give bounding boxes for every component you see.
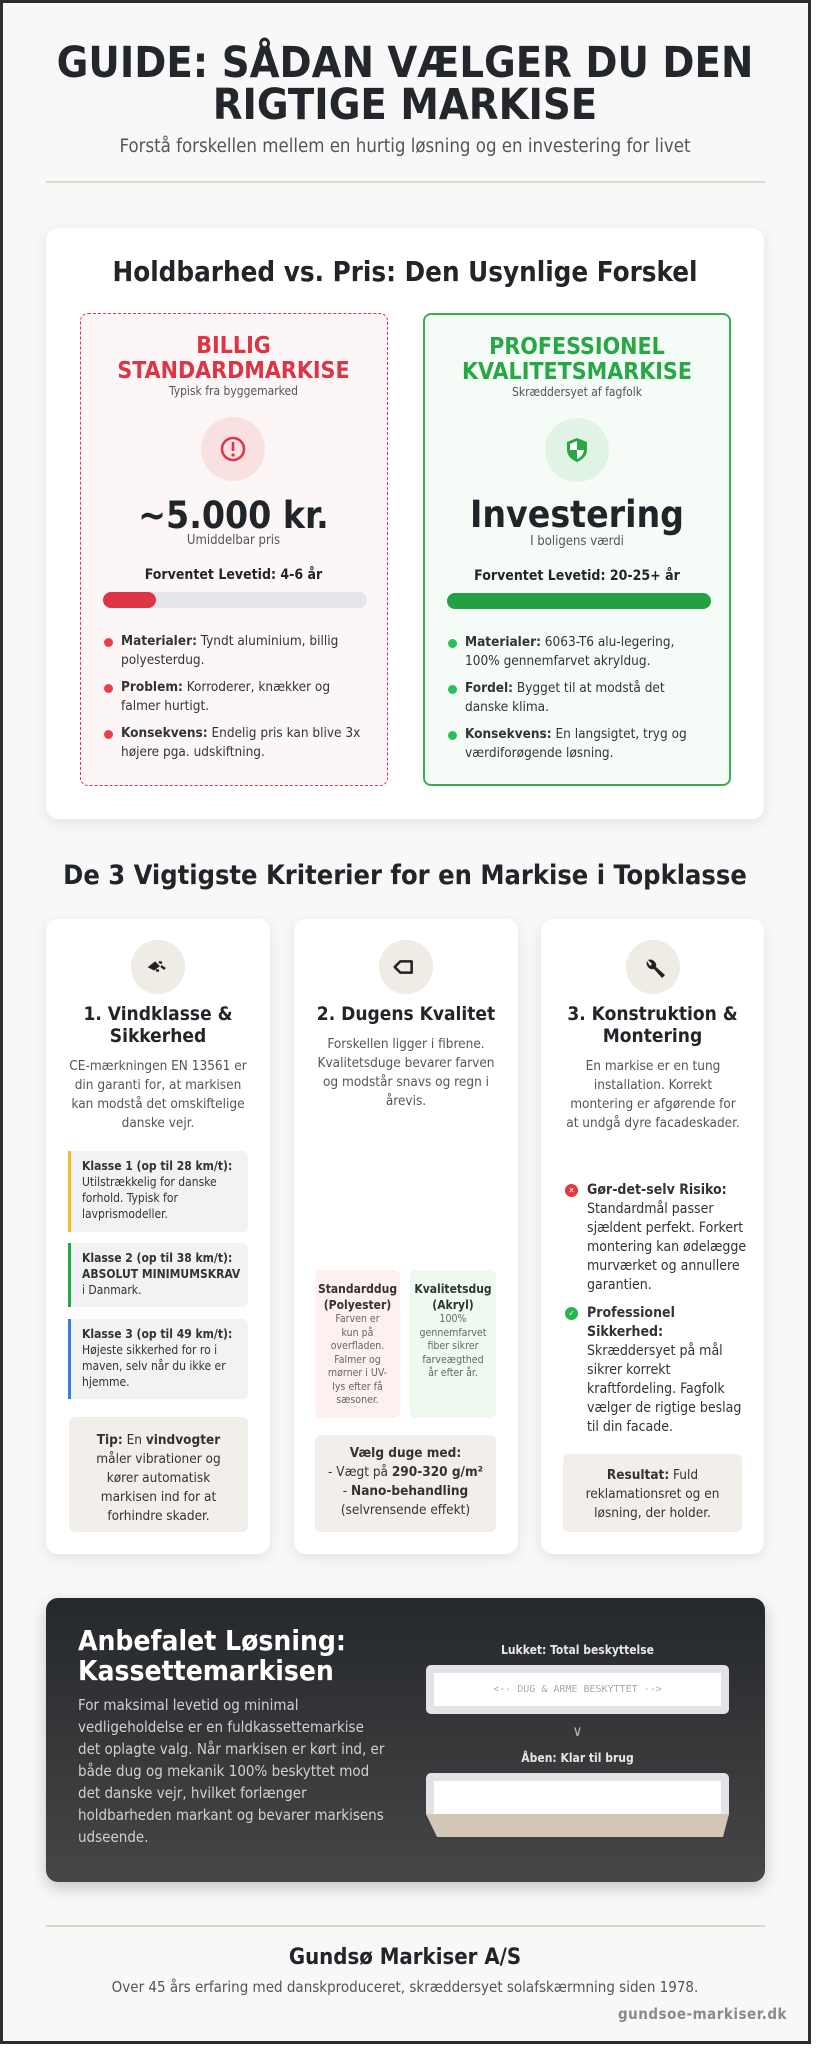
panel: criterion 3: En markise er en tung: [586, 1058, 720, 1074]
panel: durability vs price: [46, 228, 764, 819]
klasse 1: forhold. Typisk for: [82, 1191, 178, 1205]
panel: criterion 2: [294, 919, 518, 1554]
bar: lifetime: [447, 593, 711, 609]
panel: criterion 3: Montering: [603, 1025, 702, 1047]
choose box: (selvrensende effekt): [341, 1502, 470, 1518]
subtitle: Forstå forskellen mellem en hurtig løsning og en investering for livet: [120, 136, 690, 157]
panel: professional awning: KVALITETSMARKISE: [462, 359, 692, 385]
choose box: - Vægt på 290-320 g/m²: [328, 1464, 483, 1480]
klasse 2: ABSOLUT MINIMUMSKRAV: [82, 1267, 240, 1281]
tip box: Tip: En vindvogter måler vibrationer og kører automatisk markisen ind for at forhindre skader.: [96, 1432, 221, 1524]
klasse 1: lavprismodeller.: [82, 1207, 168, 1221]
panel: professional awning: PROFESSIONEL: [489, 334, 665, 360]
icon: shield: [545, 418, 609, 482]
panel: criterion 1: Sikkerhed: [110, 1025, 206, 1047]
fabric: standard: Standarddug (Polyester): [318, 1282, 397, 1312]
choose box: [315, 1435, 496, 1532]
panel: criterion 3: [541, 919, 764, 1554]
panel: cheap awning: Forventet Levetid: 4-6 år: [145, 567, 322, 583]
fabric: quality: gennemfarvet: [420, 1326, 486, 1338]
choose box: - Nano-behandling: [343, 1483, 468, 1499]
arrow: ∨: [573, 1722, 582, 1740]
klasse 3: Højeste sikkerhed for ro i: [82, 1343, 217, 1357]
klasse 2: i Danmark.: [82, 1283, 141, 1297]
choose box: Vælg duge med:: [350, 1445, 461, 1461]
heading: criteria: De 3 Vigtigste Kriterier for en Markise i Topklasse: [63, 860, 747, 891]
diagram: open cassette: Åben: Klar til brug: [521, 1751, 634, 1765]
panel: cheap awning: ~5.000 kr.: [138, 494, 329, 537]
panel: criterion 2: Forskellen ligger i fibrene. Kvalitetsduge bevarer farven og modstår snavs og regn i årevis.: [317, 1036, 494, 1109]
panel: criterion 1: CE-mærkningen EN 13561 er din garanti for, at markisen kan modstå det omskiftelige danske vejr.: [69, 1058, 247, 1131]
klasse 3: hjemme.: [82, 1375, 130, 1389]
heading: Holdbarhed vs. Pris: Den Usynlige Forskel: [112, 256, 697, 288]
panel: cheap awning: Konsekvens: Endelig pris kan blive 3x højere pga. udskiftning.: [121, 725, 360, 760]
fabric: quality: Kvalitetsdug (Akryl): [414, 1282, 492, 1312]
panel: professional awning: Investering: [470, 493, 684, 536]
panel: professional awning: Fordel: Bygget til at modstå det danske klima.: [465, 680, 665, 715]
fabric: standard: Farven er: [335, 1313, 380, 1325]
panel: criterion 3: installation. Korrekt: [594, 1077, 712, 1093]
panel: cheap awning: BILLIG: [196, 333, 271, 359]
panel: professional awning: Skræddersyet af fagfolk: [512, 385, 642, 399]
fabric: quality: 100%: [439, 1313, 466, 1325]
klasse 1: [68, 1151, 248, 1232]
footer: url: gundsoe-markiser.dk: [618, 2005, 787, 2023]
panel: criterion 3: 3. Konstruktion &: [567, 1003, 738, 1025]
panel: criterion 1: 1. Vindklasse &: [83, 1003, 233, 1025]
panel: recommended solution: <-- DUG & ARME BESKYTTET -->: [493, 1684, 662, 1695]
panel: criterion 3: ✕: [568, 1186, 575, 1195]
panel: criterion 3: montering er afgørende for: [570, 1096, 736, 1112]
panel: cheap awning: Typisk fra byggemarked: [169, 384, 298, 398]
klasse 1: Utilstrækkelig for danske: [82, 1175, 217, 1189]
klasse 2: [68, 1243, 248, 1307]
panel: professional awning: [423, 313, 731, 786]
panel: cheap awning: [80, 313, 388, 786]
klasse 1: Klasse 1 (op til 28 km/t):: [82, 1159, 232, 1173]
panel: cheap awning: Umiddelbar pris: [187, 533, 280, 548]
icon: warning: [201, 417, 265, 481]
risk item: Gør-det-selv Risiko: Standardmål passer sjældent perfekt. Forkert montering kan ødelægge murværket og annullere garantien.: [587, 1182, 746, 1293]
fabric: standard: mørner i UV-: [328, 1367, 387, 1379]
heading: [78, 1624, 346, 1687]
fabric: quality: år efter år.: [428, 1367, 478, 1379]
fabric: standard: sæsoner.: [336, 1394, 379, 1406]
fabric: standard: lys efter få: [332, 1380, 383, 1392]
text: For maksimal levetid og minimal vedligeholdelse er en fuldkassettemarkise det oplagte valg. Når markisen er kørt ind, er både dug og mekanik 100% beskyttet mod det danske vejr, hvilket forlænger holdbarheden markant og bevarer markisens udseende.: [78, 1696, 384, 1846]
panel: professional awning: Materialer: 6063-T6 alu-legering, 100% gennemfarvet akryldug.: [465, 634, 674, 669]
icon: tag: [379, 940, 433, 994]
result box: [563, 1454, 742, 1532]
fabric: standard: [315, 1270, 400, 1418]
footer: tagline: Over 45 års erfaring med danskproduceret, skræddersyet solafskærmning siden 1978.: [112, 1978, 698, 1996]
panel: professional awning: Konsekvens: En langsigtet, tryg og værdiforøgende løsning.: [465, 726, 687, 761]
fabric: standard: overfladen.: [331, 1340, 384, 1352]
fabric: quality: [410, 1270, 496, 1418]
fabric: quality: fiber sikrer: [427, 1340, 478, 1352]
panel: cheap awning: Materialer: Tyndt aluminium, billig polyesterdug.: [121, 633, 338, 668]
panel: cheap awning: Problem: Korroderer, knækker og falmer hurtigt.: [121, 679, 330, 714]
panel: professional awning: Forventet Levetid: 20-25+ år: [474, 568, 680, 584]
fabric: standard: Falmer og: [334, 1354, 381, 1366]
klasse 3: [68, 1319, 248, 1399]
bar: lifetime: [103, 592, 367, 608]
panel: recommended solution: [46, 1598, 765, 1882]
panel: criterion 1: [46, 919, 270, 1554]
panel: criterion 3: ✓: [568, 1309, 575, 1318]
heading: Anbefalet Løsning:: [78, 1624, 346, 1657]
heading: Kassettemarkisen: [78, 1654, 334, 1687]
icon: wind: [131, 940, 185, 994]
panel: professional awning: I boligens værdi: [530, 534, 624, 549]
fabric: standard: kun på: [342, 1326, 373, 1338]
tip box: [69, 1417, 248, 1532]
icon: wrench: [626, 940, 680, 994]
klasse 3: Klasse 3 (op til 49 km/t):: [82, 1327, 232, 1341]
panel: cheap awning: STANDARDMARKISE: [117, 358, 350, 384]
klasse 3: maven, selv når du ikke er: [82, 1359, 226, 1373]
result box: Resultat: Fuld reklamationsret og en løsning, der holder.: [586, 1467, 719, 1521]
diagram: closed cassette: Lukket: Total beskyttelse: [501, 1643, 654, 1657]
title: GUIDE: SÅDAN VÆLGER DU DEN RIGTIGE MARKISE: [57, 38, 753, 130]
klasse 2: Klasse 2 (op til 38 km/t):: [82, 1251, 232, 1265]
panel: criterion 3: at undgå dyre facadeskader.: [566, 1115, 740, 1131]
footer: company: Gundsø Markiser A/S: [289, 1945, 521, 1970]
panel: criterion 2: 2. Dugens Kvalitet: [317, 1003, 495, 1025]
fabric: quality: farveægthed: [422, 1354, 484, 1366]
pro item: Professionel Sikkerhed: Skræddersyet på mål sikrer korrekt kraftfordeling. Fagfolk vælger de rigtige beslag til din facade.: [587, 1305, 741, 1435]
